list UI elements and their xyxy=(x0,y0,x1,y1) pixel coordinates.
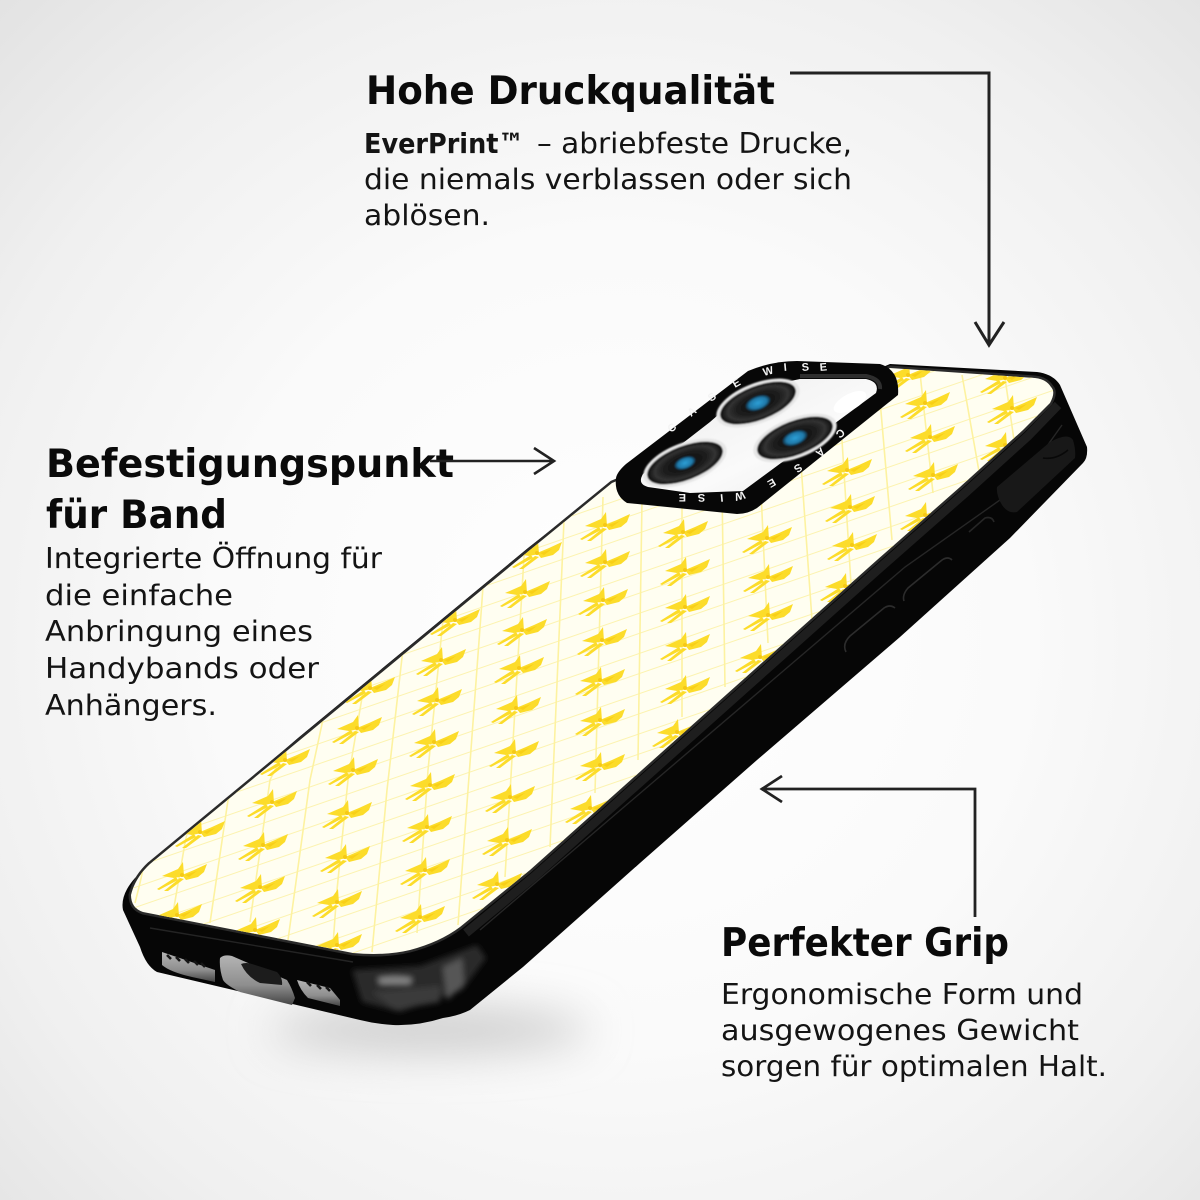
heading: Befestigungspunkt fuer Band: Befestigungspunkt xyxy=(46,442,454,487)
volume up button xyxy=(904,558,952,601)
heading: Befestigungspunkt fuer Band xyxy=(46,442,454,538)
right lens xyxy=(747,404,843,472)
yellow bow pattern xyxy=(152,362,1037,961)
body text: EverPrint™ xyxy=(364,127,524,160)
side face highlight xyxy=(480,425,1062,930)
body text: Integrierte Öffnung für xyxy=(45,541,382,575)
body text: Ergonomische Form und xyxy=(721,978,1083,1011)
callout: print quality xyxy=(364,69,1004,345)
callout: strap attachment xyxy=(45,442,554,722)
ring inner shade xyxy=(800,376,880,389)
island ring xyxy=(616,361,898,514)
body text: Handybands oder xyxy=(45,652,319,685)
left speaker xyxy=(162,952,215,982)
lenses xyxy=(637,369,843,497)
vertical grid lines xyxy=(135,373,1014,952)
heading: Befestigungspunkt fuer Band: für Band xyxy=(46,493,227,538)
body text: ablösen. xyxy=(364,199,490,232)
bottom lip line xyxy=(150,928,353,962)
diagonal grid xyxy=(132,371,1054,954)
printed back panel xyxy=(131,368,1054,954)
left lens xyxy=(637,429,733,497)
body text: sorgen für optimalen Halt. xyxy=(721,1050,1107,1083)
body text xyxy=(721,978,1107,1083)
camera island xyxy=(616,361,898,514)
body text: – abriebfeste Drucke, xyxy=(537,127,852,160)
brand text bottom: CASEWISE xyxy=(679,426,847,503)
body text: ausgewogenes Gewicht xyxy=(721,1014,1079,1047)
body text xyxy=(364,127,852,232)
heading: Hohe Druckqualitaet: Hohe Druckqualität xyxy=(366,69,775,114)
screen rim xyxy=(131,368,1053,954)
body text: Anhängers. xyxy=(45,689,217,722)
flash xyxy=(830,386,870,418)
mute switch xyxy=(969,518,994,532)
grip crease xyxy=(1043,450,1068,458)
volume down button xyxy=(845,606,895,652)
grip panel xyxy=(997,436,1075,512)
heading: Perfekter Grip: Perfekter Grip xyxy=(721,921,1009,966)
bottom corner sheen xyxy=(352,945,486,1012)
body text: die einfache xyxy=(45,579,233,612)
side rim band xyxy=(466,405,1058,933)
callout: grip xyxy=(721,776,1107,1083)
body text: Anbringung eines xyxy=(45,615,313,648)
arrow to top edge xyxy=(790,73,1004,345)
arrow to camera xyxy=(430,448,554,474)
case body xyxy=(122,364,1087,1025)
charging port xyxy=(220,955,295,1005)
phone case xyxy=(100,340,1087,1025)
phone shadow xyxy=(270,1008,590,1052)
top lens xyxy=(710,369,806,437)
body text xyxy=(45,541,382,722)
brand text top: CASEWISE xyxy=(665,361,828,435)
right speaker xyxy=(297,980,340,1006)
arrow to side xyxy=(762,776,975,917)
body text: die niemals verblassen oder sich xyxy=(364,163,852,196)
camera window xyxy=(641,379,877,493)
panel base xyxy=(131,368,1054,954)
